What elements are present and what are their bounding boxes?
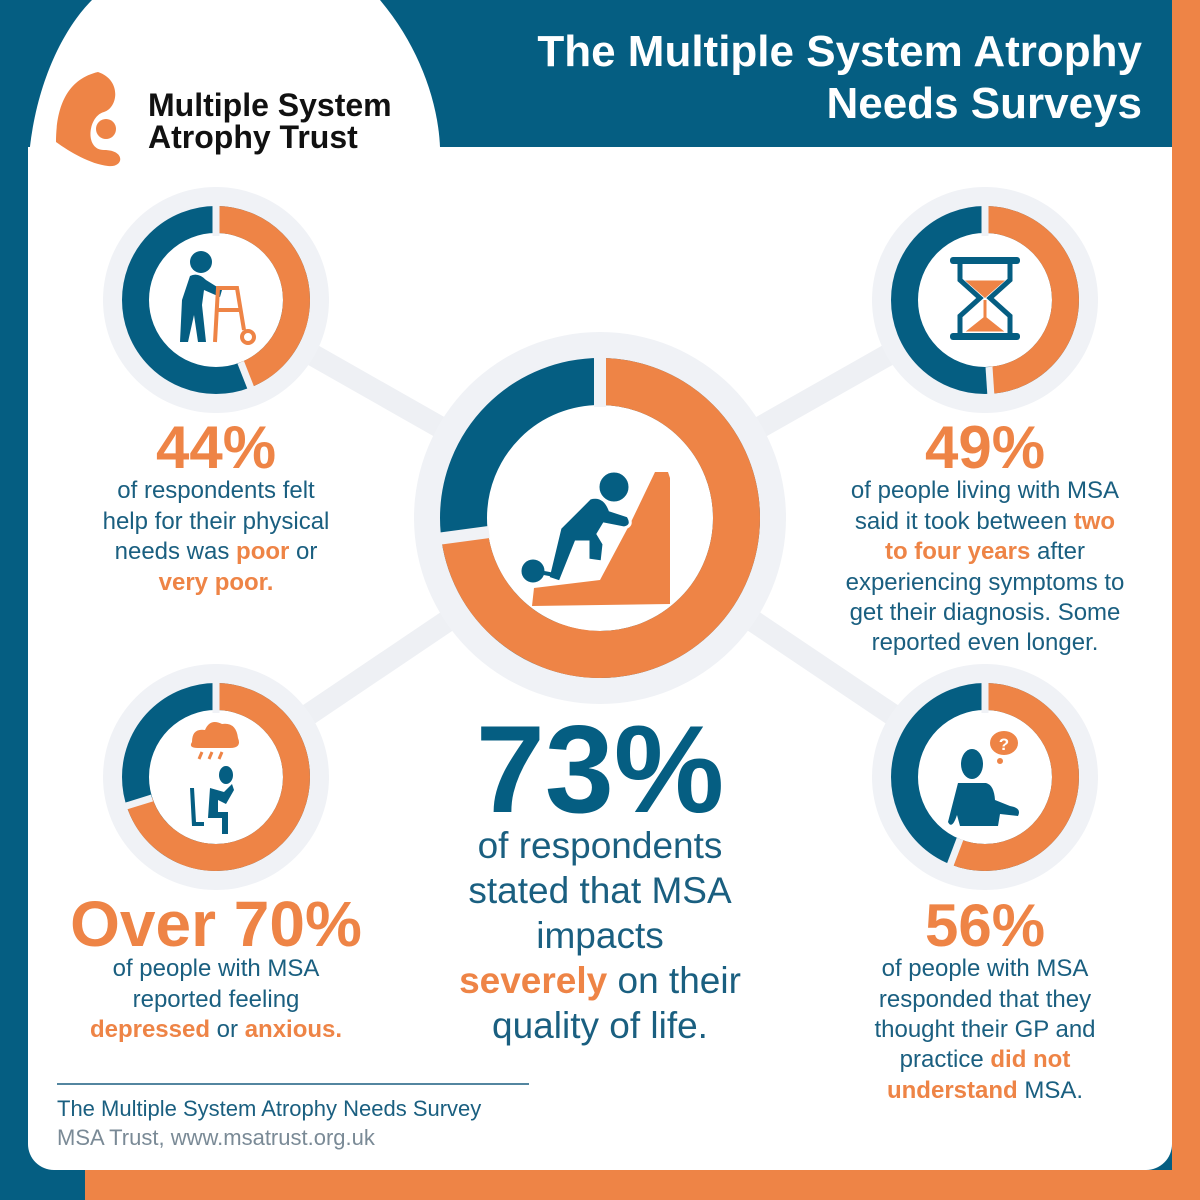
stat: 56%: thought their GP and bbox=[874, 1016, 1096, 1043]
stat: 73%: of respondents bbox=[478, 825, 722, 866]
stat: 49% bbox=[846, 414, 1124, 656]
stat: 73%: 73% bbox=[476, 701, 724, 839]
icon: hourglass bbox=[950, 257, 1020, 340]
stat: 49%: 49% bbox=[925, 414, 1045, 481]
stat: 49%: experiencing symptoms to bbox=[846, 569, 1124, 596]
stat: 73%: impacts bbox=[536, 915, 664, 956]
stat: 44%: needs was poor or bbox=[115, 538, 317, 565]
stat: 56%: 56% bbox=[925, 892, 1045, 959]
logo: Atrophy Trust bbox=[148, 119, 358, 155]
icon: climbing figure bbox=[520, 471, 670, 606]
donut: center 73% bbox=[414, 332, 786, 704]
title: Needs Surveys bbox=[826, 79, 1142, 128]
stat: 56% bbox=[874, 892, 1096, 1104]
title bbox=[537, 27, 1143, 128]
stat: over 70%: depressed or anxious. bbox=[90, 1016, 342, 1043]
stat: over 70%: Over 70% bbox=[70, 888, 362, 960]
stat: 56%: practice did not bbox=[900, 1046, 1070, 1073]
donut: top-left 44% bbox=[103, 187, 329, 413]
stat: 56%: of people with MSA bbox=[882, 955, 1088, 982]
stat: over 70%: of people with MSA bbox=[113, 955, 319, 982]
stat: over 70% bbox=[70, 888, 362, 1043]
donut: bottom-left 70% bbox=[103, 664, 329, 890]
stat: 49%: reported even longer. bbox=[872, 629, 1098, 656]
connector lines bbox=[216, 300, 985, 777]
source footer: The Multiple System Atrophy Needs Survey bbox=[57, 1096, 481, 1121]
stat: 49%: said it took between two bbox=[855, 508, 1115, 535]
donut: top-right 49% bbox=[872, 187, 1098, 413]
stat: 49%: of people living with MSA bbox=[851, 477, 1119, 504]
logo: Multiple System bbox=[148, 87, 392, 123]
donut: bottom-right 56% bbox=[872, 664, 1098, 890]
logo bbox=[56, 72, 392, 166]
source footer bbox=[57, 1084, 529, 1150]
stat: 44%: of respondents felt bbox=[117, 477, 315, 504]
icon: depressed person bbox=[190, 722, 239, 834]
stat: 44%: very poor. bbox=[159, 569, 273, 596]
icon: doctor bbox=[948, 731, 1019, 826]
stat: 73%: severely on their bbox=[459, 960, 741, 1001]
stat: 73%: quality of life. bbox=[492, 1005, 708, 1046]
icon: doctor: ? bbox=[999, 735, 1009, 754]
stat: 44%: help for their physical bbox=[103, 508, 329, 535]
stat: 44%: 44% bbox=[156, 414, 276, 481]
title: The Multiple System Atrophy bbox=[537, 27, 1143, 76]
stat: 73% bbox=[459, 701, 741, 1046]
icon: walker bbox=[180, 251, 222, 342]
stat: 56%: responded that they bbox=[879, 986, 1091, 1013]
stat: 56%: understand MSA. bbox=[887, 1077, 1083, 1104]
stat: 49%: to four years after bbox=[885, 538, 1085, 565]
stat: 49%: get their diagnosis. Some bbox=[850, 599, 1120, 626]
stat: 73%: stated that MSA bbox=[468, 870, 732, 911]
source footer: MSA Trust, www.msatrust.org.uk bbox=[57, 1125, 376, 1150]
stat: 44% bbox=[103, 414, 329, 596]
stat: over 70%: reported feeling bbox=[133, 986, 299, 1013]
